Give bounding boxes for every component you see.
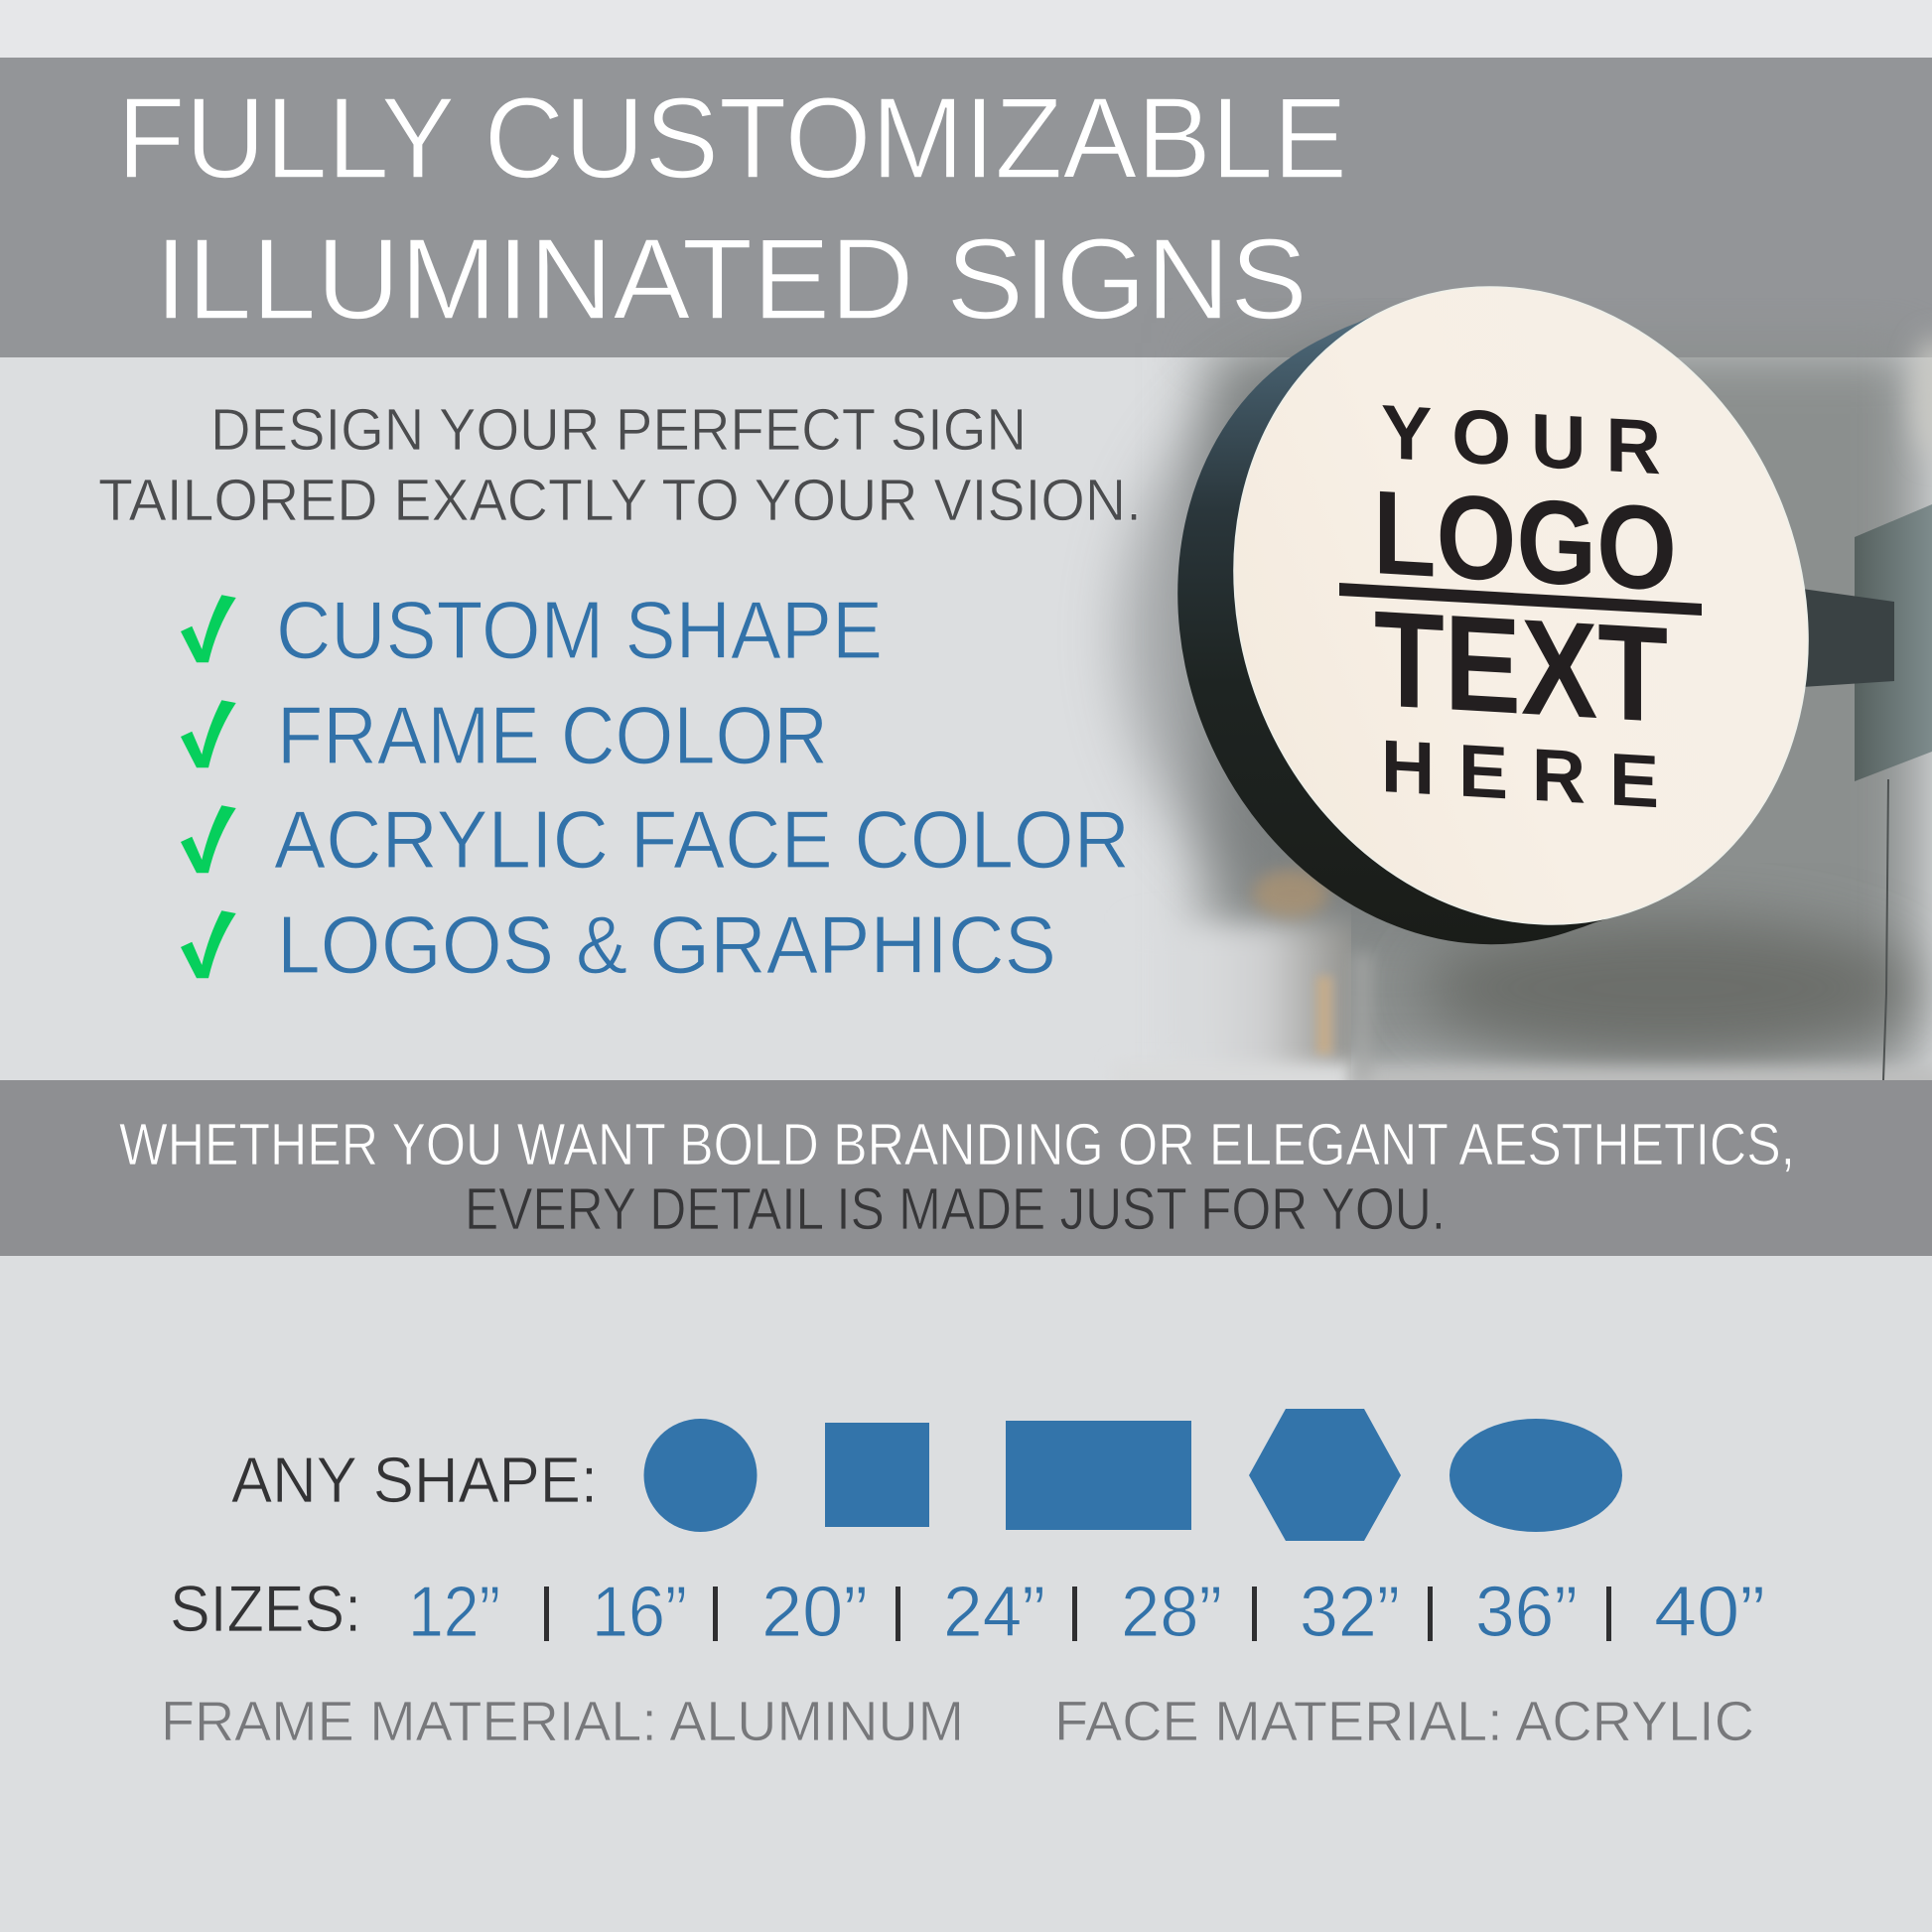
shape: rectangle xyxy=(1006,1421,1191,1530)
cable xyxy=(1883,779,1888,1080)
title xyxy=(117,73,1347,344)
any shape label: ANY SHAPE: xyxy=(231,1444,598,1516)
shape: square xyxy=(825,1423,929,1527)
sign text: TEXT: TEXT xyxy=(1374,583,1668,752)
icon: check mark xyxy=(181,595,236,662)
title: FULLY CUSTOMIZABLE xyxy=(117,73,1347,203)
top light strip xyxy=(0,0,1932,58)
subtitle: TAILORED EXACTLY TO YOUR VISION. xyxy=(98,468,1142,533)
header band xyxy=(0,58,1932,357)
feature: custom shape: CUSTOM SHAPE xyxy=(276,584,883,676)
icon: check mark xyxy=(181,805,236,873)
sign lettering xyxy=(1339,389,1702,823)
size options xyxy=(408,1573,1765,1652)
feature checklist xyxy=(181,584,1130,991)
photo: sign frame body xyxy=(1177,316,1606,945)
size options: 24” xyxy=(943,1573,1045,1652)
shape: oval xyxy=(1449,1419,1622,1532)
sign text: HERE: HERE xyxy=(1381,724,1659,823)
feature: logos and graphics: LOGOS & GRAPHICS xyxy=(277,898,1056,991)
feature: frame color: FRAME COLOR xyxy=(277,689,828,781)
frame material: FRAME MATERIAL: ALUMINUM xyxy=(161,1690,964,1753)
photo: wall backdrop behind sign xyxy=(1112,338,1932,1102)
size options: 20” xyxy=(761,1573,868,1652)
icon: check mark xyxy=(181,700,236,767)
sizes label: SIZES: xyxy=(170,1572,361,1645)
size options: 12” xyxy=(408,1573,500,1652)
size options: 40” xyxy=(1654,1573,1765,1652)
size options: 16” xyxy=(592,1573,687,1652)
feature: acrylic face color: ACRYLIC FACE COLOR xyxy=(274,793,1130,886)
size options: 36” xyxy=(1475,1573,1578,1652)
title: ILLUMINATED SIGNS xyxy=(155,214,1308,344)
size options: 32” xyxy=(1300,1573,1400,1652)
icon: check mark xyxy=(181,910,236,978)
subtitle: DESIGN YOUR PERFECT SIGN xyxy=(210,397,1027,463)
photo: wall mount plate xyxy=(1855,504,1932,781)
middle band xyxy=(0,1080,1932,1256)
sign text: LOGO: LOGO xyxy=(1373,466,1677,617)
shape: hexagon xyxy=(1249,1409,1401,1541)
sign divider line xyxy=(1339,583,1702,616)
shape options xyxy=(643,1409,1622,1541)
photo: mounting arm xyxy=(1802,589,1894,687)
middle band text xyxy=(119,1112,1795,1242)
face material: FACE MATERIAL: ACRYLIC xyxy=(1054,1690,1754,1753)
middle band text: EVERY DETAIL IS MADE JUST FOR YOU. xyxy=(465,1176,1446,1242)
shape: circle xyxy=(643,1419,757,1532)
photo: sign acrylic face xyxy=(1137,198,1905,1014)
size options: 28” xyxy=(1121,1573,1222,1652)
sign text: YOUR: YOUR xyxy=(1381,389,1661,490)
subtitle xyxy=(98,397,1142,533)
